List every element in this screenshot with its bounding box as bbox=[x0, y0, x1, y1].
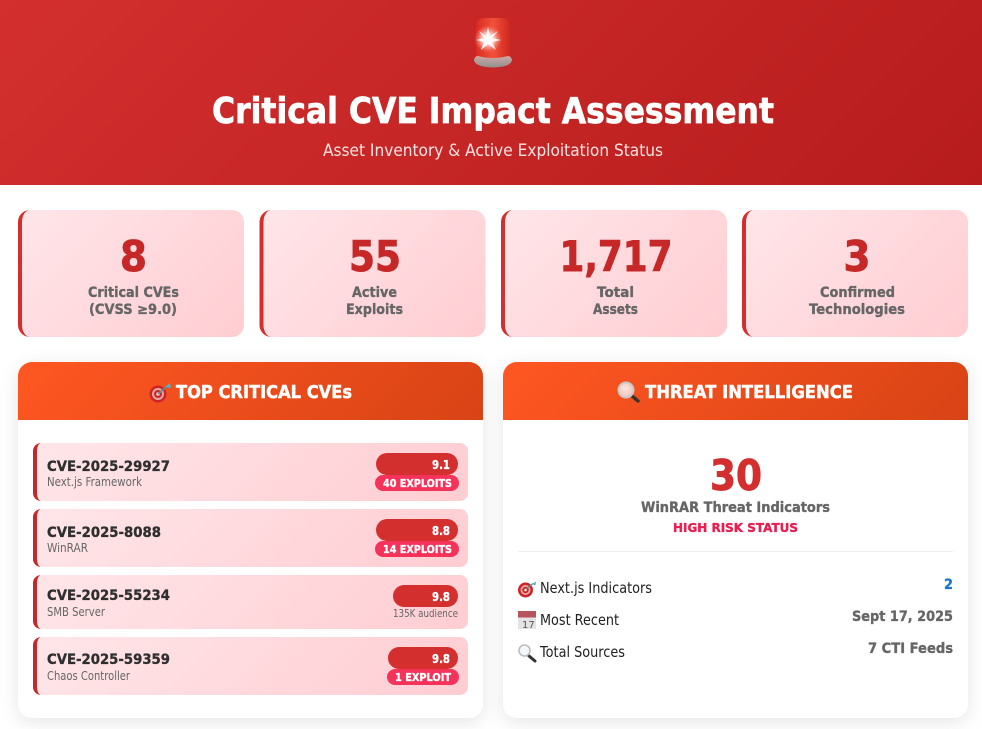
CVE row: CVE-2025-29927 bbox=[33, 443, 468, 501]
panel: top critical CVEs bbox=[18, 362, 483, 718]
stat card: total assets bbox=[501, 210, 727, 337]
CVE row: CVE-2025-59359: 1 EXPLOIT bbox=[395, 671, 451, 684]
icon: target with dart bbox=[150, 383, 171, 402]
panel: threat intelligence bbox=[503, 362, 968, 718]
CVE row: CVE-2025-8088 bbox=[33, 509, 468, 567]
stat card: critical CVEs: Critical CVEs bbox=[88, 285, 179, 301]
stat card: total assets: Total bbox=[597, 285, 634, 301]
detail row: most recent bbox=[518, 609, 953, 631]
detail row: most recent: Most Recent bbox=[540, 611, 619, 629]
detail row: Next.js indicators: 2 bbox=[944, 577, 953, 593]
CVE row: CVE-2025-55234: 9.8 bbox=[432, 590, 450, 604]
stat card: confirmed technologies bbox=[742, 210, 968, 337]
title: Critical CVE Impact Assessment bbox=[212, 91, 774, 132]
CVE row: CVE-2025-8088: WinRAR bbox=[47, 540, 88, 555]
icon: calendar: 17 bbox=[522, 620, 535, 631]
CVE row: CVE-2025-29927: Next.js Framework bbox=[47, 474, 143, 489]
CVE row: CVE-2025-55234: CVE-2025-55234 bbox=[47, 588, 170, 604]
icon: magnifying glass bbox=[618, 382, 638, 401]
stat card: critical CVEs: 8 bbox=[120, 232, 147, 281]
icon: magnifying glass bbox=[519, 645, 535, 661]
stat card: confirmed technologies: 3 bbox=[844, 232, 870, 281]
stat card: total assets: 1,717 bbox=[560, 232, 672, 281]
stat card: confirmed technologies: Confirmed bbox=[820, 285, 895, 301]
panel heading: top critical CVEs: TOP CRITICAL CVEs bbox=[176, 382, 352, 403]
key metric: WinRAR indicators: HIGH RISK STATUS bbox=[673, 521, 798, 535]
stat card: active exploits: 55 bbox=[349, 232, 401, 281]
stat card: total assets: Assets bbox=[593, 302, 638, 318]
detail row: total sources: 7 CTI Feeds bbox=[868, 641, 953, 657]
icon: calendar bbox=[518, 611, 536, 631]
detail row: total sources: Total Sources bbox=[539, 643, 625, 661]
icon: target bbox=[518, 582, 536, 598]
panel heading: threat intelligence bbox=[503, 362, 968, 420]
detail row: total sources bbox=[519, 641, 953, 661]
detail row: Next.js indicators bbox=[518, 577, 953, 598]
CVE row: CVE-2025-8088: CVE-2025-8088 bbox=[47, 525, 161, 541]
CVE row: CVE-2025-8088: 8.8 bbox=[432, 524, 450, 538]
key metric: WinRAR indicators bbox=[641, 451, 830, 535]
key metric: WinRAR indicators: 30 bbox=[710, 451, 762, 500]
stat card: active exploits bbox=[260, 210, 486, 337]
CVE row: CVE-2025-29927: 9.1 bbox=[432, 458, 450, 472]
key metric: WinRAR indicators: WinRAR Threat Indicators bbox=[641, 500, 830, 516]
header banner bbox=[0, 0, 982, 185]
CVE row: CVE-2025-59359: CVE-2025-59359 bbox=[47, 652, 170, 668]
CVE row: CVE-2025-29927: 40 EXPLOITS bbox=[383, 477, 452, 490]
CVE row: CVE-2025-59359 bbox=[33, 637, 468, 695]
detail row: Next.js indicators: Next.js Indicators bbox=[540, 579, 652, 597]
stat card: critical CVEs: (CVSS ≥9.0) bbox=[89, 302, 177, 318]
CVE row: CVE-2025-8088: 14 EXPLOITS bbox=[383, 543, 452, 556]
CVE row: CVE-2025-55234 bbox=[33, 575, 468, 629]
panel heading: threat intelligence: THREAT INTELLIGENCE bbox=[645, 382, 853, 403]
stat card: active exploits: Active bbox=[352, 285, 397, 301]
stat card: active exploits: Exploits bbox=[346, 302, 403, 318]
icon: police siren bbox=[474, 18, 512, 68]
CVE row: CVE-2025-29927: CVE-2025-29927 bbox=[47, 459, 170, 475]
CVE row: CVE-2025-59359: Chaos Controller bbox=[47, 668, 131, 683]
CVE row: CVE-2025-55234: 135K audience bbox=[393, 608, 458, 620]
panel heading: top critical CVEs bbox=[18, 362, 483, 420]
stat card: confirmed technologies: Technologies bbox=[809, 302, 905, 318]
CVE row: CVE-2025-55234: SMB Server bbox=[47, 604, 106, 619]
detail row: most recent: Sept 17, 2025 bbox=[852, 609, 953, 625]
subtitle: Asset Inventory & Active Exploitation Status bbox=[323, 141, 663, 161]
CVE row: CVE-2025-59359: 9.8 bbox=[432, 652, 450, 666]
stat card: critical CVEs bbox=[18, 210, 244, 337]
